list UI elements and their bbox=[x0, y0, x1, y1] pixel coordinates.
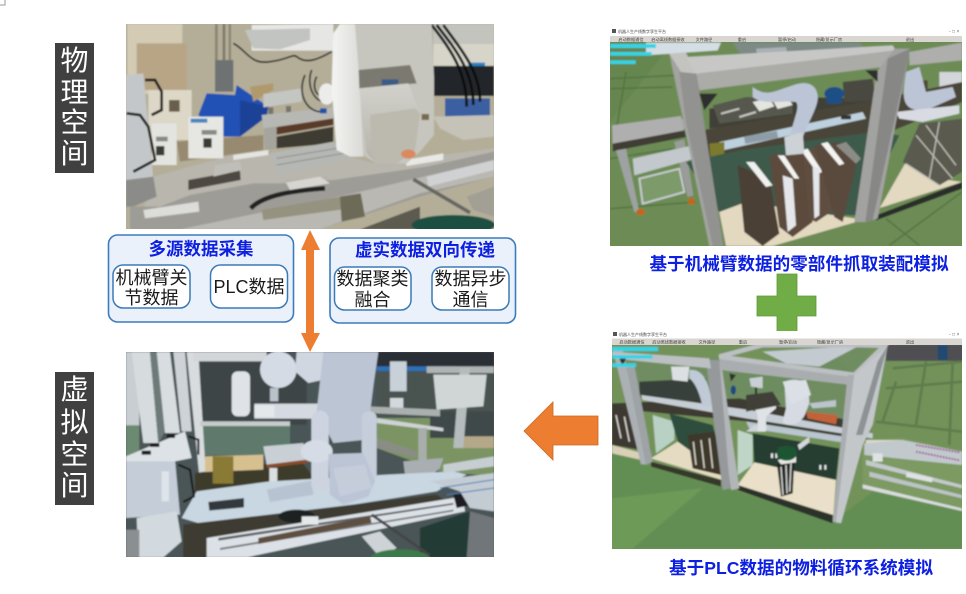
label: physical space: 间 bbox=[60, 138, 89, 169]
screenshot: robot arm part assembly simulation: 启动数据通信 bbox=[618, 36, 644, 43]
screenshot: robot arm part assembly simulation: 隐藏/显示厂房 bbox=[816, 36, 842, 43]
panel: multi-source data collection bbox=[108, 235, 294, 322]
screenshot: PLC material circulation simulation: 文件路径 bbox=[699, 338, 715, 346]
screenshot: PLC material circulation simulation: 退出 bbox=[906, 338, 914, 346]
caption: PLC material circulation simulation: 基于PLC数据的物料循环系统模拟 bbox=[669, 558, 933, 578]
arrow: left orange bbox=[524, 402, 598, 460]
screenshot: robot arm part assembly simulation: 退出 bbox=[906, 36, 914, 43]
screenshot: robot arm part assembly simulation: 文件路径 bbox=[696, 36, 712, 43]
icon: green plus bbox=[757, 274, 816, 337]
label: virtual space bbox=[55, 372, 94, 505]
screenshot: robot arm part assembly simulation: 重启 bbox=[738, 36, 746, 43]
photo: virtual robot arm workstation bbox=[120, 348, 500, 568]
label: physical space: 空 bbox=[60, 107, 89, 138]
screenshot: PLC material circulation simulation bbox=[606, 331, 966, 552]
box: PLC data bbox=[210, 265, 288, 308]
screenshot: PLC material circulation simulation: 启动数据通信 bbox=[619, 338, 645, 346]
heading: multi-source data collection: 多源数据采集 bbox=[148, 239, 254, 259]
photo: physical robot arm workstation bbox=[120, 20, 500, 235]
caption: robot arm part assembly simulation: 基于机械臂数据的零部件抓取装配模拟 bbox=[649, 254, 949, 274]
screenshot: PLC material circulation simulation: - □ × bbox=[949, 332, 959, 338]
screenshot: PLC material circulation simulation: 暂停/启动 bbox=[779, 338, 797, 346]
label: virtual space: 空 bbox=[60, 439, 89, 470]
box: asynchronous data communication bbox=[432, 267, 509, 310]
screenshot: robot arm part assembly simulation: 启动离线数据接收 bbox=[651, 36, 686, 43]
label: physical space: 物 bbox=[60, 45, 89, 76]
box: data clustering fusion bbox=[334, 267, 411, 310]
box: robot arm joint data bbox=[113, 265, 190, 308]
box: asynchronous data communication: 通信 bbox=[452, 290, 488, 310]
label: physical space bbox=[55, 43, 94, 173]
box: asynchronous data communication: 数据异步 bbox=[434, 269, 506, 289]
screenshot: PLC material circulation simulation: 机器人生产线数字孪生平台 bbox=[619, 331, 667, 337]
label: virtual space: 间 bbox=[60, 470, 89, 501]
screenshot: PLC material circulation simulation: 启动离线数据接收 bbox=[652, 338, 687, 346]
box: data clustering fusion: 数据聚类 bbox=[336, 269, 408, 289]
screenshot: PLC material circulation simulation: 重启 bbox=[739, 338, 747, 346]
screenshot: robot arm part assembly simulation bbox=[606, 28, 966, 249]
label: physical space: 理 bbox=[60, 77, 89, 108]
box: robot arm joint data: 机械臂关 bbox=[116, 268, 188, 288]
panel: bidirectional virtual-real data transfer bbox=[330, 238, 516, 323]
screenshot: robot arm part assembly simulation: - □ × bbox=[949, 29, 959, 35]
label: virtual space: 拟 bbox=[60, 407, 89, 438]
box: robot arm joint data: 节数据 bbox=[124, 288, 178, 308]
corner mark bbox=[0, 0, 5, 5]
box: data clustering fusion: 融合 bbox=[354, 290, 390, 310]
arrow: bidirectional orange bbox=[301, 230, 320, 352]
screenshot: robot arm part assembly simulation: 暂停/启动 bbox=[778, 36, 796, 43]
screenshot: robot arm part assembly simulation: 机器人生产线数字孪生平台 bbox=[618, 28, 666, 34]
screenshot: PLC material circulation simulation: 隐藏/显示厂房 bbox=[817, 338, 843, 346]
heading: bidirectional data transfer: 虚实数据双向传递 bbox=[355, 240, 495, 260]
label: virtual space: 虚 bbox=[60, 374, 89, 405]
box: PLC data: PLC数据 bbox=[213, 277, 285, 297]
